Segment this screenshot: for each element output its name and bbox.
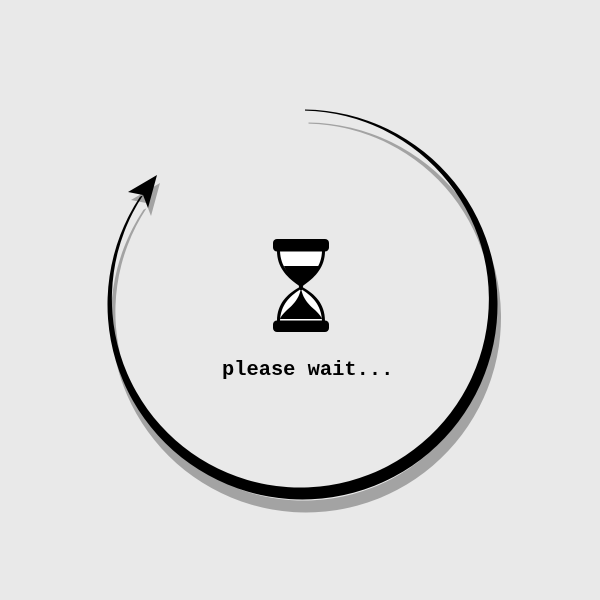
glass waist	[298, 283, 304, 290]
top cap	[273, 239, 329, 252]
circular arrow	[108, 110, 498, 499]
arrow head	[128, 175, 157, 208]
bottom cap	[273, 320, 329, 332]
lower sand	[280, 287, 322, 319]
circular arrow shadow	[111, 122, 501, 512]
hourglass glass	[280, 251, 322, 321]
upper sand	[284, 266, 319, 286]
caption: please wait...	[222, 359, 393, 382]
hourglass outline	[277, 251, 325, 321]
icon: hourglass	[273, 239, 329, 332]
